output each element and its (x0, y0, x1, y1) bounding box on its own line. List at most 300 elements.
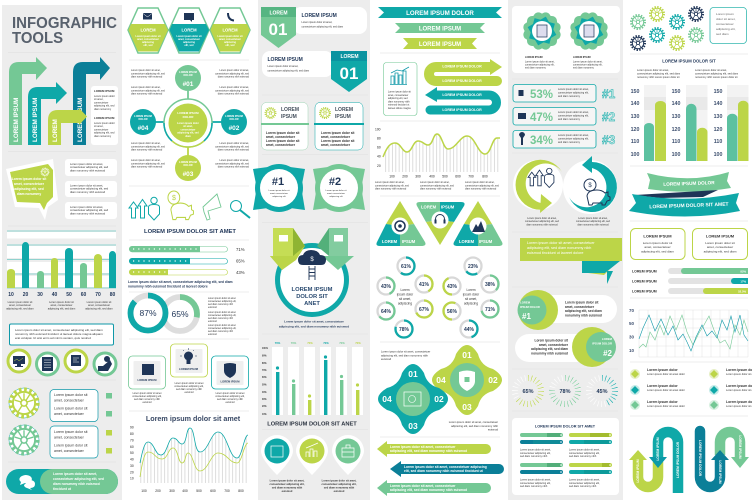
arrow banner: green (377, 480, 491, 496)
text box (10, 324, 114, 345)
chart axis: 80% (262, 363, 267, 365)
arrow labels: LOREM IPSUM (77, 98, 84, 142)
bottom pill callout (6, 469, 118, 494)
pin: green briefcase (332, 435, 364, 475)
arrow banner: dark teal: elit, sed diam nonummy nibh euismod tincidunt ut (404, 469, 484, 473)
bottom pill callout: diam nonummy nibh euismod (53, 482, 100, 486)
chart axis (262, 348, 268, 416)
card 01 left (261, 7, 367, 48)
card 01 right: 01 (340, 64, 358, 83)
legend text: Lorem ipsum dolor sit amet dolor (647, 372, 685, 376)
panel: column three background (258, 0, 370, 500)
gear card right: Lorem ipsum dolor sit (321, 139, 355, 143)
chart captions: amet, consectetuer (88, 303, 110, 307)
chart captions: amet, consectetuer (50, 303, 73, 307)
axes: 150 (631, 89, 639, 95)
donut 65 percent: 65% (171, 309, 189, 319)
hub captions: diam nonummy nibh euismod (218, 76, 250, 79)
chart axes: 60 (130, 445, 134, 449)
percent rows: LOREM IPSUM (632, 270, 657, 274)
chart value labels: 70% (275, 341, 281, 345)
text card: arrow notes: sit amet, (94, 125, 104, 128)
chart notes (637, 68, 738, 79)
chart value labels: 70% (291, 341, 297, 345)
pin captions: consectetuer adipiscing elit, (322, 482, 357, 486)
donut notes (208, 297, 237, 336)
wave captions (375, 181, 500, 191)
ring caption: adipiscing elit, sed diam nonummy nibh euismod (279, 324, 349, 328)
wave chart axes: 700 (468, 174, 474, 178)
ring stats left note: adipiscing (398, 302, 412, 306)
bottom pill callout: consectetuer adipiscing elit, sed (53, 477, 104, 481)
badge #1 (253, 164, 305, 212)
stat 38: 38% (485, 282, 496, 288)
hexagon: lime phone (210, 8, 250, 53)
stat card 34: and diam nonummy (558, 141, 581, 144)
chart value labels: 70% (323, 341, 329, 345)
legend text: Lorem ipsum dolor (647, 400, 678, 404)
line chart axis: 70 (629, 308, 635, 313)
badge #2 (313, 164, 365, 212)
pin captions: sed diam nonummy nibh (324, 486, 355, 490)
chart notes: Lorem ipsum dolor sit amet, (637, 69, 669, 72)
donut charts (130, 296, 197, 331)
gear card left (261, 102, 309, 150)
card 01 left: LOREM (269, 10, 288, 16)
axes: 150 (672, 89, 680, 95)
stat 43: 43% (447, 284, 458, 290)
node 01: DOLOR (183, 74, 193, 77)
stat 44: 44% (464, 327, 475, 333)
donut notes: sed diam nonummy nibh (208, 331, 234, 333)
hexagon: lime phone: amet, consectetuer (219, 38, 241, 41)
chart axis: 20% (262, 406, 267, 408)
percent labels: 65% (236, 258, 245, 264)
text card: arrow notes: LOREM IPSUM (94, 116, 115, 120)
hexagon: teal chat: Lorem ipsum dolor sit (176, 35, 202, 38)
diamond green right (709, 400, 719, 410)
chart axis: 50% (262, 384, 267, 386)
slider captions: consectetuer adipiscing elit, (520, 482, 551, 485)
rank numbers (602, 87, 616, 147)
badge: book (522, 11, 562, 51)
diamond lime (630, 369, 640, 379)
diamond green (630, 400, 640, 410)
s-arrow: teal: LOREM IPSUM DOLOR (442, 108, 482, 112)
cycle captions: consectetuer adipiscing elit, sed (525, 220, 560, 223)
axes: 100 (714, 152, 722, 158)
axis labels: 80 (110, 292, 115, 298)
axis labels (8, 292, 115, 298)
gears (9, 388, 39, 455)
card: lightbulb: LOREM IPSUM (179, 367, 199, 371)
hexagon: teal chat: elit, sed (185, 44, 194, 47)
cycle right (563, 156, 617, 214)
sunburst gauges (515, 378, 615, 404)
badge captions: consectetuer adipiscing elit, (573, 64, 603, 66)
chart axes (130, 426, 244, 493)
triangle: headset (416, 202, 465, 245)
petal: lime shield (432, 345, 502, 415)
chart title: Lorem ipsum dolor sit amet (146, 414, 241, 423)
icon: gear (41, 168, 49, 176)
text cards: diam nonummy nibh euismod (70, 190, 106, 194)
icon: megaphone (203, 194, 221, 220)
percent labels: 71% (236, 247, 245, 252)
slider captions: Lorem ipsum dolor sit amet, (569, 478, 600, 482)
card: monitor: euismod (142, 401, 152, 404)
donut notes: euismod (208, 321, 217, 323)
hexagon: lime mail: elit, sed (144, 44, 153, 47)
line chart axis: 10 (629, 348, 635, 353)
stat 61: 61% (401, 264, 412, 270)
badge #1: #1 (272, 176, 284, 188)
hexagon: teal chat: adipiscing (183, 41, 195, 44)
stat card 53: Lorem ipsum dolor sit amet, (558, 88, 589, 91)
chart axes: 800 (238, 489, 244, 493)
card: monitor: LOREM IPSUM (138, 378, 157, 382)
card 01 left: consectetuer adipiscing elit, sed diam (302, 26, 343, 28)
ring callout with arrows: DOLOR SIT (296, 294, 328, 300)
text card: arrow notes: LOREM IPSUM (94, 89, 115, 93)
hub captions: consectetuer adipiscing elit, sed (131, 162, 166, 165)
pin captions: sed diam nonummy nibh (272, 486, 303, 490)
pin captions: Lorem ipsum dolor sit amet, (322, 480, 356, 482)
s-arrow: lime: LOREM IPSUM DOLOR (442, 79, 482, 83)
text cards (65, 159, 117, 219)
gauge 45: 45% (596, 389, 608, 395)
percent rows: LOREM IPSUM (632, 280, 657, 284)
ring stats left note: sit amet, (399, 297, 411, 301)
chart note card (384, 62, 417, 116)
gear card right: LOREM (335, 107, 353, 113)
line chart axis: 30 (629, 334, 635, 340)
hub captions: consectetuer adipiscing elit, sed (215, 72, 250, 75)
wave chart axes: 80 (377, 136, 381, 140)
chart value labels: 70% (307, 341, 313, 345)
card: lightbulb: Lorem ipsum dolor sit amet (175, 382, 203, 385)
text cards: diam nonummy nibh euismod (70, 168, 106, 172)
node 03: #03 (183, 171, 194, 178)
s-arrow: lime: LOREM IPSUM DOLOR (442, 64, 482, 68)
column five (512, 6, 622, 495)
callout #1: adipiscing elit, sed diam (565, 309, 602, 313)
wave chart (375, 128, 500, 178)
chart axis: 60% (262, 377, 267, 379)
axes: 130 (672, 114, 680, 120)
hexagon: lime phone: adipiscing (224, 41, 236, 44)
callout #2: amet, consectetuer (539, 343, 569, 347)
card 01 right (262, 51, 367, 92)
gear note card: dolor sit amet, (716, 17, 736, 21)
card: shield: LOREM IPSUM (221, 380, 240, 384)
cycle captions (525, 217, 611, 226)
text card: arrow notes: adipiscing elit, sed (94, 132, 115, 135)
speech bubble callout: diam nonummy (17, 192, 41, 196)
green segment: LOREM IPSUM (738, 435, 742, 459)
hub captions: Lorem ipsum dolor sit amet, (131, 69, 160, 72)
ring stats right note: sit amet, (465, 297, 477, 301)
arrow banner: green: Lorem ipsum dolor sit amet, consectetuer (390, 484, 456, 488)
line chart (130, 426, 248, 493)
gears cluster (631, 7, 703, 50)
card: monitor: Lorem ipsum dolor sit amet (133, 392, 161, 395)
gear note card: sed diam (716, 32, 729, 36)
card: shield: Lorem ipsum dolor sit amet (216, 392, 244, 395)
gear card left: amet, consectetuer (266, 135, 296, 139)
section heading: LOREM IPSUM DOLOR SIT AMET (144, 229, 236, 235)
stat 71: 71% (485, 307, 496, 313)
hub captions: Lorem ipsum dolor sit amet, (220, 142, 249, 145)
badge #1: Lorem ipsum dolor sit (269, 190, 289, 192)
stat card 47: consectetuer adipiscing elit, (558, 115, 589, 118)
arrow banner: dark teal (390, 461, 504, 477)
hub captions: Lorem ipsum dolor sit amet, (220, 69, 249, 72)
badge: book copy (569, 11, 609, 51)
chart axis: 90% (262, 356, 267, 358)
ring stats right note: adipiscing (464, 302, 478, 306)
ribbon: lime (403, 38, 477, 49)
cycle captions: diam nonummy nibh euismod (526, 223, 558, 226)
arrow labels: LOREM (52, 119, 59, 142)
text card: arrow notes: Lorem ipsum dolor (94, 95, 115, 98)
pin captions (270, 478, 357, 493)
gear card right: amet, consectetuer (321, 135, 351, 139)
line chart axis (629, 308, 635, 353)
axes: 140 (714, 101, 722, 107)
column two (128, 8, 250, 493)
arrow: teal (28, 82, 67, 145)
badge captions: LOREM IPSUM (525, 56, 543, 59)
badge captions: Lorem ipsum dolor sit amet, (525, 60, 554, 64)
donut notes: euismod (208, 334, 217, 336)
text card: arrow notes (91, 86, 118, 145)
pin: lime chart (296, 435, 328, 475)
card: lightbulb: consectetuer adipiscing elit, (174, 385, 204, 388)
hexagon: teal chat: amet, consectetuer (178, 38, 200, 41)
wave chart axes: 200 (402, 174, 408, 178)
chart one (644, 85, 666, 161)
callout #2: adipiscing elit, sed diam (531, 347, 568, 351)
stat card 47: Lorem ipsum dolor sit amet, (558, 111, 589, 114)
ribbon: lime: LOREM IPSUM (419, 42, 461, 48)
list cards: Lorem ipsum dolor sit (54, 430, 87, 434)
wave chart axes: 600 (455, 174, 461, 178)
card 01 right: Lorem ipsum dolor sit amet, (268, 65, 298, 68)
gear card left: Lorem ipsum dolor sit (266, 131, 299, 135)
slider captions: sed diam nonummy nibh (569, 485, 597, 488)
arrow: lime envelope (270, 228, 305, 270)
arrow labels: LOREM IPSUM (13, 98, 20, 142)
column one (6, 15, 118, 494)
title: INFOGRAPHIC (12, 15, 117, 32)
pin: teal book (261, 435, 293, 475)
axes: 130 (631, 114, 639, 120)
bordered cards (630, 228, 748, 260)
text box: erat volutpat. Ut wisi enim ad minim veniam, quis nostrud (15, 336, 91, 340)
text card: arrow notes: consectetuer (94, 101, 108, 104)
ring stats right (444, 254, 498, 338)
gear card right: amet, consectetuer (321, 143, 351, 147)
card: shield: consectetuer adipiscing elit, (215, 395, 245, 398)
cycle captions: diam nonummy nibh euismod (577, 223, 609, 226)
gear note card: Lorem ipsum (716, 12, 734, 16)
note bottom right: euismod (488, 428, 498, 432)
bordered cards: LOREM IPSUM (706, 234, 735, 238)
node 04: LOREM IPSUM (134, 115, 152, 118)
slider captions: sed diam nonummy nibh (520, 455, 548, 458)
arrow lime head overlay (73, 108, 87, 125)
chart captions: Lorem ipsum dolor sit (87, 301, 111, 304)
badge captions: sed diam nonummy (525, 66, 547, 70)
ring callout with arrows (270, 228, 354, 317)
gauge 78: 78% (559, 389, 571, 395)
node 02: DOLOR (229, 118, 239, 121)
note bottom right: Lorem ipsum dolor sit amet, consectetuer (449, 421, 498, 424)
text cards: consectetuer adipiscing elit, sed (70, 187, 109, 191)
badge #2: amet consectetuer (327, 192, 345, 195)
s-arrow: teal: LOREM IPSUM DOLOR (442, 93, 482, 97)
arrow: green envelope (317, 228, 354, 270)
chart captions: adipiscing elit, sed diam (6, 306, 34, 310)
progress bars (129, 246, 245, 275)
slider bars (520, 433, 612, 474)
callout #2: LOREM (602, 337, 612, 341)
icon: arrows and person (129, 197, 160, 220)
wave captions: consectetuer adipiscing elit, sed (375, 184, 410, 187)
card 01 left: 01 (269, 20, 287, 39)
card: lightbulb: euismod (184, 391, 194, 394)
ring callout with arrows: ANET (304, 301, 320, 307)
stat 78: 78% (399, 327, 410, 333)
lime banner (520, 238, 622, 284)
bordered cards: amet, consectetuer (707, 245, 733, 249)
chart value labels: 70% (339, 341, 345, 345)
snake arrow left (629, 432, 680, 493)
triangle: headset: IPSUM (441, 204, 455, 210)
wave captions: Lorem ipsum dolor sit amet, (420, 181, 450, 184)
axes: 120 (672, 127, 680, 133)
ribbon banners (629, 172, 740, 216)
badge #2: #2 (329, 176, 341, 188)
wave chart axes (375, 128, 488, 178)
chart axes: 20 (130, 470, 134, 474)
callout #1: amet, consectetuer (565, 305, 595, 309)
card: shield: euismod (225, 401, 235, 404)
text card: arrow notes: diam nonummy (94, 135, 112, 138)
icon: piggy bank (168, 191, 193, 220)
list cards (50, 390, 98, 458)
wave captions: Lorem ipsum dolor sit amet, (465, 181, 494, 184)
chart axes: 30 (130, 464, 134, 468)
chart axis: 70% (262, 370, 267, 372)
chart captions: adipiscing elit, sed diam (85, 306, 113, 310)
card: monitor (128, 356, 166, 404)
speech bubble callout: amet, consectetuer (14, 182, 45, 186)
chart notes: consectetuer adipiscing elit, sed diam (637, 71, 680, 75)
stat card 34: Lorem ipsum dolor sit amet, (558, 134, 589, 137)
wave chart axes: 300 (415, 174, 421, 178)
text box: Lorem ipsum dolor sit amet, consectetuer adipiscing elit, sed diam (15, 328, 103, 332)
note top left: euismod (381, 357, 392, 361)
text cards: diam nonummy nibh euismod (70, 211, 106, 215)
bordered cards: Lorem ipsum dolor sit (643, 241, 672, 245)
hub captions: diam nonummy nibh euismod (131, 166, 163, 169)
stat 43: 43% (381, 284, 392, 290)
text card: arrow notes: sit amet, (94, 98, 104, 101)
node 01 (175, 65, 201, 91)
note top left: Lorem ipsum dolor sit amet, consectetuer (381, 350, 430, 354)
chart captions: Lorem ipsum dolor sit (49, 301, 74, 304)
rank numbers: #2 (602, 110, 616, 124)
bordered cards: Lorem ipsum dolor sit (705, 241, 735, 245)
hub captions: Lorem ipsum dolor sit amet, (131, 159, 160, 162)
note top left: adipiscing elit, sed diam nonummy nibh (381, 353, 428, 357)
petal: teal safe: 01 (408, 369, 418, 379)
callout #2: nonummy nibh euismod (531, 351, 568, 355)
hexagon: lime phone: Lorem ipsum dolor sit (217, 35, 243, 38)
chart captions (6, 300, 113, 310)
triangle: target (376, 201, 426, 246)
chart axes: 70 (130, 438, 134, 442)
chart notes: consectetuer adipiscing elit, sed diam (695, 71, 738, 75)
gear: lime (9, 388, 39, 418)
chart note card: diam nonummy nibh (388, 100, 410, 103)
cycle left (513, 160, 563, 213)
axes: 130 (714, 114, 722, 120)
axes (631, 89, 722, 158)
card: monitor: sed diam nonummy nibh (134, 398, 161, 401)
hub captions: consectetuer adipiscing elit, sed (215, 145, 250, 148)
node 04: #04 (138, 125, 149, 132)
paired bar charts (631, 85, 748, 161)
node 04 (130, 109, 156, 135)
hexagon: lime phone: elit, sed (226, 44, 235, 47)
chart axes: 300 (169, 489, 175, 493)
callout #1: #1 (522, 312, 531, 321)
legend text: Lorem ipsum dolor sit amet dolor (647, 388, 685, 392)
triangle: mountain (454, 201, 502, 246)
icon cards (128, 344, 248, 404)
chart note card: Lorem ipsum dolor sit (388, 90, 411, 94)
chart note card: laoreet dolore magna (388, 107, 411, 110)
arrow banner: lime (377, 441, 491, 457)
hub captions: Lorem ipsum dolor sit amet, (131, 142, 160, 145)
axis labels: 10 (8, 292, 14, 298)
wave captions: diam nonummy nibh euismod (420, 188, 452, 191)
hub center: DOLOR (183, 115, 194, 119)
ribbon: green (395, 23, 485, 33)
panel: column one background (2, 5, 122, 500)
ring stats right note: ipsum dolor (463, 292, 480, 296)
dark teal segment (698, 431, 729, 487)
map pins (261, 435, 364, 475)
lime banner: Lorem ipsum dolor sit amet, consectetuer (527, 241, 595, 245)
gear card left: IPSUM (281, 114, 297, 120)
icon: cloud ladder: $ (310, 257, 314, 263)
donut notes: euismod (208, 307, 217, 309)
badge captions: Lorem ipsum dolor sit amet, (573, 60, 602, 64)
text cards: consectetuer adipiscing elit, sed (70, 208, 109, 212)
badge #2: adipiscing elit (329, 195, 343, 198)
sliders card: LOREM IPSUM DOLOR SIT AMET (535, 424, 596, 428)
chart axes: 80 (130, 432, 134, 436)
node 01: #01 (183, 81, 194, 88)
text box: nonummy nibh euismod tincidunt ut laoreet dolore magna aliquam (15, 332, 103, 336)
hub center: LOREM IPSUM (177, 111, 199, 115)
hub diagram (130, 65, 247, 181)
progress caption: Lorem ipsum dolor sit amet, consectetuer adipiscing elit, sed diam (128, 280, 233, 284)
